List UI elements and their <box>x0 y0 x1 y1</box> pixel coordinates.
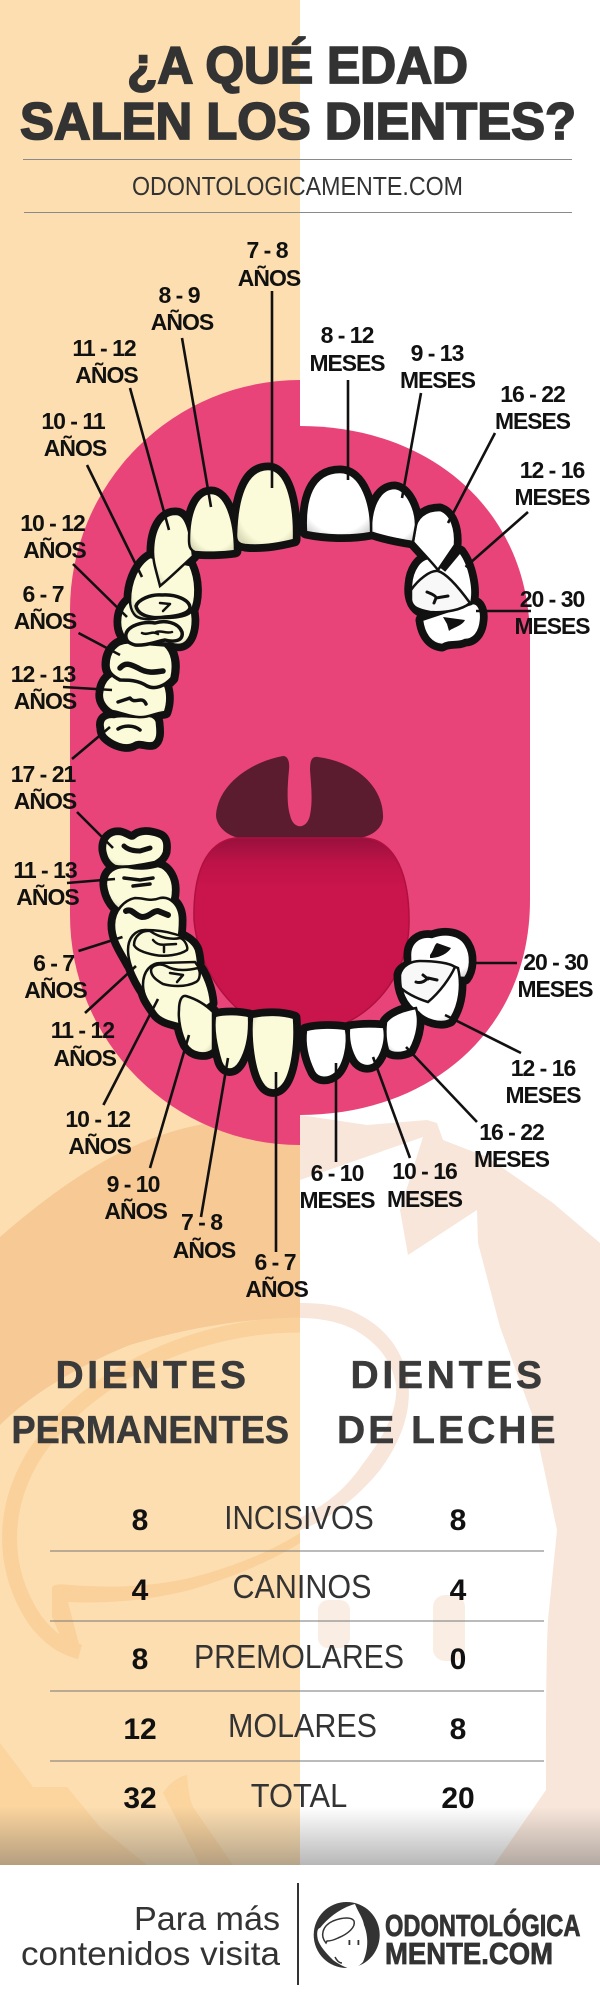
row: caninos: 4 <box>450 1574 467 1607</box>
label: lower 11-13 años <box>13 857 115 910</box>
label: lower 20-30 meses <box>475 949 593 1002</box>
teeth: black outline silhouettes <box>102 469 481 1090</box>
row: molares: 8 <box>450 1713 466 1746</box>
row: premolares <box>132 1638 466 1676</box>
label: upper 16-22 meses: 16 - 22 <box>500 381 565 407</box>
label: lower 11-12 años: AÑOS <box>53 1044 117 1071</box>
label: upper 6-7 años: AÑOS <box>14 607 77 634</box>
label: upper 11-12 años <box>72 335 169 530</box>
label: upper 10-12 años: 10 - 12 <box>20 510 85 536</box>
label: lower 12-16 meses: MESES <box>506 1082 581 1108</box>
row: caninos: 4 <box>132 1574 149 1607</box>
row: premolares: 8 <box>132 1643 148 1676</box>
label: lower 20-30 meses: MESES <box>518 976 593 1002</box>
row: incisivos <box>132 1499 466 1537</box>
heading: dientes permanentes: DIENTES <box>56 1354 246 1397</box>
label: upper 6-7 años <box>14 581 120 655</box>
label: upper 7-8 años <box>238 237 301 488</box>
label: upper 16-22 meses <box>448 381 571 523</box>
row: incisivos: INCISIVOS <box>224 1499 374 1536</box>
heading: dientes permanentes <box>12 1354 289 1452</box>
label: lower 6-7 años left: AÑOS <box>24 976 87 1003</box>
background watermark: large logo face <box>0 1115 600 1865</box>
label: upper 8-12 meses: MESES <box>310 350 385 376</box>
label: upper 7-8 años: AÑOS <box>238 264 301 291</box>
label: lower 10-12 años: 10 - 12 <box>65 1106 130 1132</box>
row: incisivos: 8 <box>132 1504 148 1537</box>
label: lower 6-7 años left: 6 - 7 <box>33 950 74 976</box>
label: upper 11-12 años: AÑOS <box>75 361 138 388</box>
footer text: Para más <box>134 1900 280 1937</box>
label: upper 8-9 años: AÑOS <box>151 308 214 335</box>
row: molares: MOLARES <box>228 1707 377 1744</box>
label: upper 6-7 años: 6 - 7 <box>22 581 64 607</box>
lower milk teeth <box>305 934 470 1078</box>
palate <box>216 756 383 838</box>
label: upper 10-12 años <box>20 510 127 617</box>
label: lower 9-10 años: AÑOS <box>104 1197 167 1224</box>
label: upper 12-13 años: 12 - 13 <box>11 661 76 687</box>
heading: dientes de leche: DE LECHE <box>337 1409 556 1452</box>
label: upper 7-8 años: 7 - 8 <box>246 237 289 263</box>
label: upper 16-22 meses: MESES <box>495 408 571 434</box>
label: 17-21 años: 17 - 21 <box>11 761 77 787</box>
label: upper 11-12 años: 11 - 12 <box>72 335 136 361</box>
label: upper 10-12 años: AÑOS <box>23 536 86 563</box>
label: lower 6-7 años center <box>245 1072 308 1302</box>
label: upper 8-12 meses: 8 - 12 <box>321 322 374 348</box>
footer panel <box>0 1865 600 2000</box>
tongue <box>194 838 409 1035</box>
bottom shadow fade <box>0 1807 600 1865</box>
label: upper 8-12 meses <box>310 322 385 480</box>
label: lower 7-8 años <box>173 1058 236 1263</box>
title <box>20 37 576 151</box>
label: lower 16-22 meses: MESES <box>474 1146 550 1172</box>
label: lower 16-22 meses: 16 - 22 <box>479 1119 544 1145</box>
label: lower 10-12 años: AÑOS <box>68 1132 131 1159</box>
label: upper 12-16 meses <box>466 457 590 567</box>
label: lower 11-13 años: 11 - 13 <box>13 857 77 883</box>
row: molares <box>123 1707 466 1746</box>
row: total: 32 <box>123 1782 157 1815</box>
footer text: contenidos visita <box>21 1935 281 1972</box>
label: 17-21 años: AÑOS <box>14 787 77 814</box>
logo wordmark: MENTE.COM <box>385 1936 553 1971</box>
row: incisivos: 8 <box>450 1504 466 1537</box>
label: upper 9-13 meses: MESES <box>400 367 476 393</box>
lower permanent teeth <box>105 834 295 1090</box>
label: lower 6-7 años center: 6 - 7 <box>254 1249 296 1275</box>
row: premolares: 0 <box>450 1643 466 1676</box>
label: lower 12-16 meses <box>445 1015 581 1108</box>
label: upper 10-11 años: AÑOS <box>44 434 107 461</box>
label: lower 10-16 meses: 10 - 16 <box>392 1158 457 1184</box>
title: ¿A QUÉ EDAD <box>127 37 468 95</box>
label: upper 8-9 años: 8 - 9 <box>158 282 200 308</box>
label: lower 12-16 meses: 12 - 16 <box>511 1055 576 1081</box>
logo icon: face in circle <box>314 1902 380 1969</box>
label: upper 20-30 meses: 20 - 30 <box>520 586 585 612</box>
subtitle with rules: ODONTOLOGICAMENTE.COM <box>132 171 463 201</box>
title: SALEN LOS DIENTES? <box>20 93 576 151</box>
row: total <box>123 1777 475 1815</box>
row: caninos: CANINOS <box>232 1568 372 1605</box>
label: upper 9-13 meses: 9 - 13 <box>411 340 464 366</box>
label: lower 10-16 meses: MESES <box>387 1186 463 1212</box>
heading: dientes de leche <box>337 1354 556 1452</box>
label: upper 12-13 años <box>11 661 112 714</box>
label: lower 7-8 años: 7 - 8 <box>181 1209 223 1235</box>
label: lower 9-10 años: 9 - 10 <box>107 1171 160 1197</box>
heading: dientes de leche: DIENTES <box>350 1354 542 1397</box>
label: upper 10-11 años <box>41 408 142 577</box>
label: upper 8-9 años <box>151 282 214 507</box>
label: upper 12-16 meses: 12 - 16 <box>520 457 585 483</box>
label: lower 11-13 años: AÑOS <box>16 883 79 910</box>
upper milk teeth <box>306 472 481 645</box>
label: lower 20-30 meses: 20 - 30 <box>523 949 588 975</box>
row: total: TOTAL <box>251 1777 347 1814</box>
label: lower 9-10 años <box>104 1035 189 1224</box>
row: molares: 12 <box>123 1713 157 1746</box>
label: upper 12-13 años: AÑOS <box>14 687 77 714</box>
label: 17-21 años <box>11 727 113 848</box>
label: lower 6-10 meses: 6 - 10 <box>311 1160 364 1186</box>
label: lower 6-7 años left <box>24 937 122 1003</box>
label: lower 11-12 años <box>51 966 136 1071</box>
heading: dientes permanentes: PERMANENTES <box>12 1409 289 1452</box>
row: total: 20 <box>441 1782 475 1815</box>
label: lower 7-8 años: AÑOS <box>173 1236 236 1263</box>
label: lower 11-12 años: 11 - 12 <box>51 1017 114 1043</box>
label: upper 9-13 meses <box>400 340 476 498</box>
upper permanent teeth <box>102 469 294 745</box>
footer text <box>21 1900 281 1972</box>
label: lower 6-10 meses: MESES <box>300 1187 375 1213</box>
label: upper 20-30 meses <box>476 586 590 639</box>
label: lower 10-12 años <box>65 999 158 1159</box>
label: upper 20-30 meses: MESES <box>514 613 590 639</box>
logo wordmark <box>385 1907 580 1971</box>
label: lower 16-22 meses <box>406 1047 550 1172</box>
label: lower 6-7 años center: AÑOS <box>245 1275 308 1302</box>
row: premolares: PREMOLARES <box>194 1638 404 1675</box>
comparison table <box>50 1499 544 1815</box>
label: upper 10-11 años: 10 - 11 <box>41 408 106 434</box>
label: lower 6-10 meses <box>300 1063 375 1213</box>
mouth: pink gums <box>70 380 530 1145</box>
label: upper 12-16 meses: MESES <box>514 484 590 510</box>
label: lower 10-16 meses <box>373 1057 463 1212</box>
row: caninos <box>132 1568 467 1607</box>
